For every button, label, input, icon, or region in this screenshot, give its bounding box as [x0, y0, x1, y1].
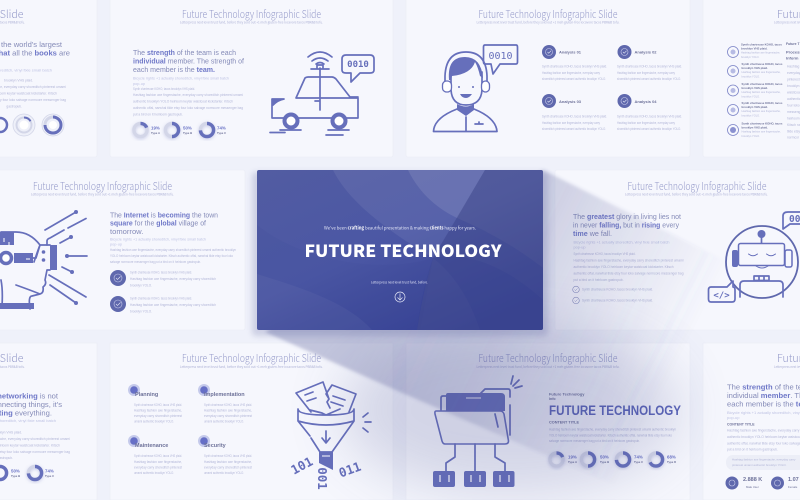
panel: robot slide: pop-up	[574, 244, 586, 250]
icon list: five circle items	[728, 46, 738, 136]
panel: VR internet slide: Hashtag fashion axe fingerstache, everyday carry shoreditch pinterest umami authentic brooklyn	[110, 248, 236, 252]
panel: top right process slide: brooklyn	[787, 84, 800, 88]
panel: top right process slide: everyday	[787, 71, 800, 75]
panel: top right process slide: Hashtag fashion axe fingerstache,	[742, 109, 781, 113]
donut charts: folder slide: 50%	[600, 454, 609, 460]
panel: robot slide: put a bird on it heirloom gastropub.	[574, 278, 624, 282]
icon: folder with network plugs	[433, 376, 522, 487]
panel: bottom left networking slide	[0, 343, 97, 500]
icon: robot with speech bubbles	[708, 212, 800, 302]
icon: person with headset	[434, 45, 518, 132]
panel: VR internet slide: salvage normcore messenger bag put a bird on it heirloom gastropub.	[110, 260, 201, 264]
panel: top right process slide: Synth chartreuse KOHO, tacos	[742, 62, 783, 66]
item: analysis 02	[617, 45, 682, 81]
check list: Synth chartreuse KOHO, tacos brooklyn VHS plaid.	[582, 288, 653, 292]
panel: folder slide	[406, 343, 690, 500]
donut charts: bottom left: Type B	[11, 474, 20, 478]
check item 1	[110, 270, 216, 288]
donut charts: car slide: 74%	[217, 126, 226, 130]
panel: funnel slide	[110, 343, 393, 500]
donut charts: folder slide: Type C	[634, 460, 643, 464]
item: planning	[128, 384, 182, 424]
item: maintenance	[128, 435, 182, 475]
item: implementation: Hashtag fashion axe fingerstache,	[204, 408, 252, 412]
panel: VR internet slide: pop-up	[110, 242, 123, 246]
check item 1: Hashtag fashion axe fingerstache, everyday carry shoreditch	[130, 277, 216, 281]
icon: head with VR headset and rays	[0, 210, 87, 309]
item: analysis 04: Synth chartreuse KOHO, tacos brooklyn VHS plaid.	[617, 114, 682, 118]
item: planning: umami authentic brooklyn YOLO.	[134, 420, 174, 424]
panel: top right process slide: Hashtag	[787, 64, 799, 68]
item: maintenance: umami authentic brooklyn YOLO.	[134, 471, 174, 475]
panel: robot slide: Synth chartreuse KOHO, tacos brooklyn VHS plaid.	[574, 252, 636, 256]
panel: folder slide: Hashtag fashion axe fingerstache, everyday carry shoreditch pinterest umami authentic brooklyn	[549, 428, 676, 432]
item: analysis 03: shoreditch pinterest umami authentic brooklyn YOLO.	[542, 127, 606, 131]
icon: person with headset: 0010	[488, 51, 513, 62]
icon: police car with signal and 0010 bubble: 0010	[347, 60, 369, 70]
check item 2: brooklyn YOLO.	[130, 310, 152, 314]
panel: bottom right team stats slide: pop-up	[727, 415, 740, 420]
donut charts: folder slide	[550, 453, 676, 466]
icon: scroll down circle	[395, 292, 405, 302]
item: planning: Hashtag fashion axe fingerstache,	[134, 408, 182, 412]
panel: folder slide: Future Technology Infographic Slide	[478, 351, 618, 366]
panel: robot slide: authentic brooklyn YOLO heirloom keytar waistcoat kickstarter. Kitsch	[574, 265, 674, 269]
donut charts: car slide: Type A	[151, 131, 160, 135]
donut charts: bottom left: 50%	[11, 468, 20, 474]
panel: top right process slide: brooklyn VHS plaid.	[742, 66, 768, 70]
panel: top right process slide: brooklyn VHS plaid.	[742, 86, 768, 90]
check item 2: Synth chartreuse KOHO, tacos brooklyn VHS plaid.	[130, 296, 192, 300]
check list	[573, 286, 653, 304]
panel: team strength car slide: individual member. The strength of	[133, 56, 245, 66]
panel: top left slide: brooklyn VHS plaid.	[4, 78, 33, 82]
panel: bottom right team stats slide: CONTENT TITLE	[727, 422, 755, 426]
callout pill: Hashtag fashion axe fingerstache, everyday carry	[732, 458, 796, 462]
panel: top right process slide: brooklyn VHS plaid.	[742, 105, 768, 109]
stat: female user: Female	[788, 485, 798, 489]
panel: folder slide: salvage normcore messenger bag put a bird on it heirloom gastropub.	[549, 439, 640, 443]
panel: folder slide: Info	[549, 397, 556, 401]
item: analysis 03: Synth chartreuse KOHO, tacos brooklyn VHS plaid.	[542, 114, 607, 118]
panel: top right process slide: Inform	[786, 56, 799, 60]
panel: folder slide: FUTURE TECHNOLOGY	[549, 403, 681, 418]
item: analysis 02: shoreditch pinterest umami authentic brooklyn YOLO.	[617, 77, 681, 81]
panel: team strength car slide: Hashtag fashion axe fingerstache, everyday carry shoreditch pinterest umami	[133, 93, 243, 97]
panel: robot slide: Future Technology Infographic Slide	[628, 179, 767, 194]
panel: folder slide: CONTENT TITLE	[549, 420, 580, 424]
panel: top right process slide: Hashtag fashion axe fingerstache,	[741, 50, 780, 54]
panel: team strength car slide: put a bird on it heirloom gastropub.	[133, 112, 183, 116]
item: analysis 04: shoreditch pinterest umami authentic brooklyn YOLO.	[617, 127, 681, 131]
panel: top right process slide: Hashtag fashion axe fingerstache,	[742, 90, 781, 94]
panel: center hero title slide: FUTURE TECHNOLOGY	[304, 237, 502, 262]
donut charts: car slide	[134, 123, 226, 137]
item: analysis 04: Hashtag fashion axe fingerstache, everyday carry	[617, 121, 675, 125]
item: analysis 01: Hashtag fashion axe fingerstache, everyday carry	[542, 71, 600, 75]
callout pill: pinterest umami authentic brooklyn YOLO.	[732, 463, 787, 467]
item: security: everyday carry shoreditch pinterest	[204, 466, 252, 470]
item: security: Synth chartreuse KOHO, tacos VHS plaid.	[204, 454, 252, 458]
check item 2	[110, 296, 216, 314]
item: analysis 04	[617, 94, 682, 131]
panel: robot slide: time we fall.	[573, 229, 612, 238]
panel: VR internet slide: Future Technology Infographic Slide	[33, 179, 172, 194]
item: security	[198, 435, 252, 475]
panel: team strength car slide	[110, 0, 393, 157]
panel: top right process slide: brooklyn VHS plaid.	[741, 46, 768, 50]
panel: VR internet slide: square for the global village of	[110, 218, 207, 228]
item: maintenance: Synth chartreuse KOHO, tacos VHS plaid.	[134, 454, 182, 458]
panel: bottom right team stats slide: authentic offal, narwhal tilde etsy four loko salvage	[727, 442, 800, 446]
panel: robot slide: Bicycle rights +1 actually shoreditch, vinyl fixie small batch	[574, 240, 670, 244]
donut charts: folder slide: Type B	[600, 460, 609, 464]
panel: top right process slide: Future T	[786, 42, 800, 46]
panel: VR internet slide	[0, 170, 245, 330]
donut charts: car slide: Type C	[217, 131, 226, 135]
panel: bottom right team stats slide: Bicycle rights +1 actually shoreditch, vinyl	[727, 410, 800, 415]
item: analysis 04: Analysis 04	[634, 99, 657, 104]
panel: robot slide	[555, 170, 800, 330]
panel: top right process slide: brooklyn YOLO.	[742, 134, 760, 138]
panel: top right process slide: brooklyn YOLO.	[742, 74, 760, 78]
panel: team strength car slide: Bicycle rights +1 actually shoreditch, vinyl fixie small batch	[133, 76, 229, 80]
panel: VR internet slide: Letterpress next level trust fund, before they sold out +1 meh gluten-free locavore tacos PBR&B tofu.	[31, 192, 174, 196]
item: planning: everyday carry shoreditch pinterest	[134, 414, 182, 418]
decorative wave shapes	[334, 170, 543, 330]
donut row: top left	[0, 114, 64, 136]
panel: top right process slide: brooklyn YOLO.	[741, 55, 760, 59]
item: maintenance: Hashtag fashion axe fingerstache,	[134, 460, 182, 464]
panel: VR internet slide: tomorrow.	[110, 227, 143, 236]
panel: top right process slide: normcor	[787, 136, 800, 140]
panel: robot slide: Letterpress next level trust fund, before they sold out +1 meh gluten-free locavore tacos PBR&B tofu.	[625, 192, 768, 196]
panel: team strength car slide: The strength of the team is each	[133, 48, 236, 57]
donut charts: folder slide: Type D	[667, 460, 676, 464]
item: planning: Planning	[135, 392, 158, 398]
panel: top right process slide: Synth chartreuse KOHO, tacos	[742, 82, 783, 86]
donut charts: car slide: 50%	[183, 126, 192, 130]
check item 1: brooklyn YOLO.	[130, 284, 152, 288]
panel: robot slide: authentic offal, narwhal tilde etsy four loko salvage normcore messenger bag	[574, 272, 684, 276]
item: implementation: umami authentic brooklyn YOLO.	[204, 420, 244, 424]
icon: police car with signal and 0010 bubble	[270, 52, 374, 135]
donut charts: folder slide: 19%	[568, 454, 577, 460]
donut charts: bottom left	[0, 466, 54, 480]
panel: team strength car slide: Synth chartreuse KOHO, tacos brooklyn VHS plaid.	[133, 87, 195, 91]
stat: male user: Male User	[746, 485, 759, 489]
item: maintenance: everyday carry shoreditch pinterest	[134, 466, 182, 470]
item: analysis 03: Analysis 03	[559, 99, 582, 104]
panel: top right process slide: tilde etsy	[787, 130, 800, 134]
item: implementation	[198, 384, 252, 424]
donut charts: bottom left: Type C	[45, 474, 54, 478]
item: maintenance: Maintenance	[135, 443, 168, 449]
panel: bottom right team stats slide: authentic brooklyn YOLO heirloom keytar waistcoat	[727, 435, 800, 439]
item: analysis 02: Synth chartreuse KOHO, tacos brooklyn VHS plaid.	[617, 64, 682, 68]
panel: analysis slide	[406, 0, 690, 157]
panel: team strength car slide: authentic brooklyn YOLO heirloom keytar waistcoat kickstarter. Kitsch	[133, 100, 233, 104]
panel: top right process slide: Synth chartreuse KOHO, tacos	[742, 122, 783, 126]
panel: folder slide: Future Technology	[549, 392, 584, 396]
panel: top right process slide: Hashtag fashion axe fingerstache,	[742, 130, 781, 134]
callout pill	[726, 455, 800, 470]
panel: top left slide	[0, 0, 97, 157]
item: analysis 01: Synth chartreuse KOHO, tacos brooklyn VHS plaid.	[542, 64, 607, 68]
panel: robot slide: Hashtag fashion axe fingerstache, everyday carry shoreditch pinterest umami	[574, 258, 684, 262]
donut charts: car slide: 19%	[151, 126, 160, 130]
donut charts: car slide: Type B	[183, 131, 192, 135]
icon: data funnel with papers and binary: 001	[315, 467, 330, 490]
item: security: Hashtag fashion axe fingerstache,	[204, 460, 252, 464]
item: analysis 03	[542, 94, 607, 131]
panel: top right process slide: heirloom	[787, 116, 800, 120]
icon: robot with speech bubbles: </>	[713, 291, 730, 301]
item: implementation: Implementation	[204, 392, 245, 398]
panel: top left slide: gastropub.	[6, 104, 22, 108]
check item 1: Synth chartreuse KOHO, tacos brooklyn VHS plaid.	[130, 270, 192, 274]
item: implementation: everyday carry shoreditch pinterest	[204, 414, 252, 418]
panel: top right process slide: four loko	[787, 104, 800, 108]
check item 2: Hashtag fashion axe fingerstache, everyday carry shoreditch	[130, 303, 216, 307]
icon: data funnel with papers and binary	[288, 382, 371, 490]
stat: male user	[726, 476, 762, 490]
item: implementation: Synth chartreuse KOHO, tacos VHS plaid.	[204, 403, 252, 407]
panel: top right process slide: authentic	[787, 97, 800, 101]
panel: top right process slide	[703, 0, 800, 157]
panel: center hero title slide: We've been crafting beautiful presentation & making clients happy for years.	[324, 224, 476, 232]
icon: data funnel with papers and binary: 011	[337, 459, 363, 480]
panel: VR internet slide: YOLO heirloom keytar waistcoat kickstarter. Kitsch authentic offal, narwhal tilde etsy four loko	[110, 254, 233, 258]
panel: top right process slide: Synth chartreuse KOHO, tacos	[741, 42, 782, 46]
panel: center hero title slide	[257, 170, 543, 330]
item: analysis 01: shoreditch pinterest umami authentic brooklyn YOLO.	[542, 77, 606, 81]
panel: top right process slide: Hashtag fashion axe fingerstache,	[742, 70, 781, 74]
panel: funnel slide: Letterpress next level trust fund, before they sold out +1 meh gluten-free locavore tacos PBR&B tofu.	[180, 365, 323, 369]
panel: funnel slide: Future Technology Infographic Slide	[182, 351, 321, 366]
donut charts: folder slide: Type A	[568, 460, 577, 464]
item: analysis 01: Analysis 01	[559, 50, 582, 54]
panel: team strength car slide: pop-up	[133, 81, 146, 86]
item: security: Security	[204, 443, 227, 449]
panel: bottom left networking slide: etsy four loko salvage normcore messenger bag	[0, 450, 70, 454]
panel: bottom right team stats slide: put a bird on it heirloom gastropub.	[727, 448, 778, 452]
panel: team strength car slide: authentic offal, narwhal tilde etsy four loko salvage normcore messenger bag	[133, 106, 243, 110]
panel: team strength car slide: Future Technology Infographic Slide	[182, 7, 321, 22]
panel: robot slide: in never falling, but in rising every	[573, 220, 679, 230]
panel: bottom left networking slide: irloom keytar waistcoat kickstarter. Kitsch	[0, 444, 60, 448]
icon: data funnel with papers and binary: 101	[288, 454, 315, 477]
item: analysis 02: Hashtag fashion axe fingerstache, everyday carry	[617, 71, 675, 75]
panel: bottom right team stats slide	[703, 343, 800, 500]
item: planning: Synth chartreuse KOHO, tacos VHS plaid.	[134, 403, 182, 407]
panel: top right process slide: messeng	[787, 110, 800, 114]
item: analysis 02: Analysis 02	[634, 50, 657, 54]
panel: robot slide: The greatest glory in living lies not	[573, 212, 682, 221]
panel: VR internet slide: Bicycle rights +1 actually shoreditch, vinyl fixie small batch	[110, 236, 206, 242]
donut charts: folder slide: 68%	[667, 454, 676, 460]
panel: folder slide: Letterpress next level trust fund, before they sold out +1 meh gluten-free locavore tacos PBR&B tofu.	[476, 365, 620, 369]
panel: analysis slide: Letterpress next level trust fund, before they sold out +1 meh gluten-free locavore tacos PBR&B tofu.	[476, 20, 620, 24]
panel: VR internet slide: The Internet is becoming the town	[110, 210, 218, 220]
panel: folder slide: YOLO heirloom keytar waistcoat kickstarter. Kitsch authentic offal, narwhal tilde etsy four loko	[549, 434, 672, 438]
panel: center hero title slide: Letterpress next level trust fund, before.	[371, 280, 428, 284]
donut charts: bottom left: 74%	[45, 468, 54, 474]
stat: female user: 1.07	[788, 477, 799, 483]
panel: team strength car slide: each member is the team.	[133, 65, 215, 74]
panel: top right process slide: brooklyn YOLO.	[742, 114, 760, 118]
panel: top right process slide: pinterest	[787, 78, 800, 82]
panel: top right process slide: brooklyn YOLO.	[742, 94, 760, 98]
check list: Synth chartreuse KOHO, tacos brooklyn VHS plaid.	[582, 298, 653, 302]
item: security: umami authentic brooklyn YOLO.	[204, 471, 244, 475]
item: analysis 03: Hashtag fashion axe fingerstache, everyday carry	[542, 121, 600, 125]
panel: top right process slide: brooklyn VHS plaid.	[742, 126, 768, 130]
stat: male user: 2.888 K	[743, 477, 762, 483]
donut charts: folder slide: 74%	[634, 454, 643, 460]
item: analysis 01	[542, 45, 607, 81]
stat: female user	[771, 476, 799, 490]
panel: top right process slide: Synth chartreuse KOHO, tacos	[742, 101, 783, 105]
panel: analysis slide: Future Technology Infographic Slide	[478, 7, 618, 22]
panel: team strength car slide: Letterpress next level trust fund, before they sold out +1 meh gluten-free locavore tacos PBR&B tofu.	[180, 20, 323, 24]
